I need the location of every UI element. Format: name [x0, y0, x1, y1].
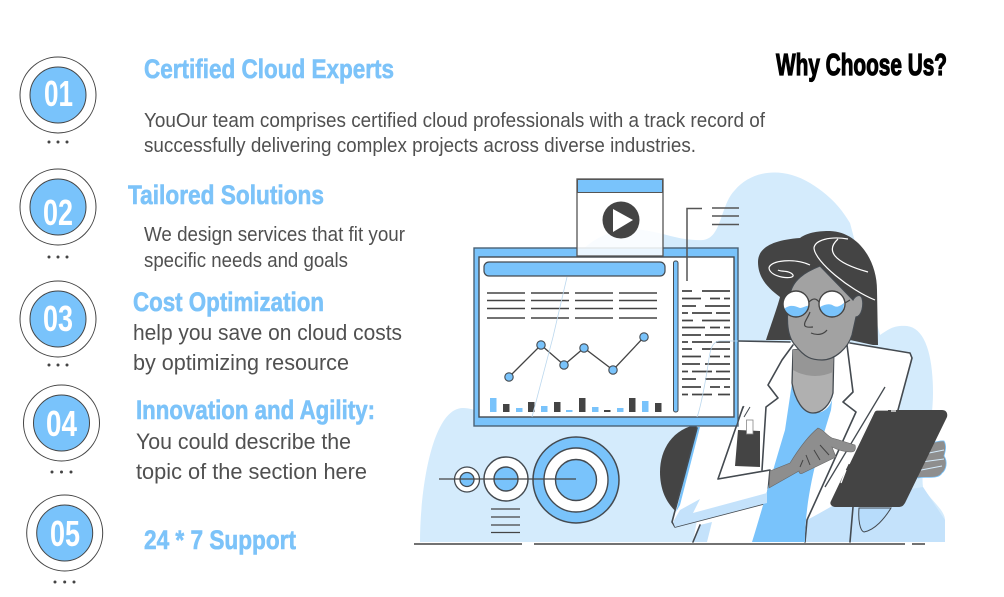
nose and smile	[805, 312, 827, 334]
video window	[577, 179, 663, 256]
coat outline	[672, 341, 912, 542]
number badge 04: 04	[46, 403, 77, 444]
neck shadow	[793, 345, 834, 376]
description 03: help you save on cloud costs	[133, 320, 402, 345]
lab coat	[672, 341, 945, 542]
item 05	[27, 495, 296, 584]
sleeve shade	[673, 493, 767, 527]
table lines	[487, 293, 657, 318]
heading: cost optimization: Cost Optimization	[133, 287, 324, 317]
coat hem shade	[693, 522, 712, 542]
coat pocket with badge	[718, 406, 770, 479]
background blob	[420, 173, 945, 542]
line chart	[505, 333, 648, 381]
illustration: doctor with dashboard	[414, 173, 947, 544]
search bar	[484, 262, 665, 276]
pointing hand	[769, 428, 855, 488]
description 01: YouOur team comprises certified cloud professionals with a track record of	[144, 110, 765, 132]
monitor	[474, 248, 738, 426]
tablet stand shade	[859, 508, 891, 532]
tablet	[830, 410, 947, 507]
article text lines	[682, 291, 730, 394]
number badge 05	[27, 495, 103, 584]
heading: certified cloud experts: Certified Cloud Experts	[144, 54, 394, 84]
item 03	[20, 281, 402, 375]
scroll bar	[674, 261, 678, 412]
callout bracket and lines	[687, 208, 739, 281]
heading: innovation and agility: Innovation and Agility:	[136, 395, 375, 425]
description 04: topic of the section here	[136, 459, 367, 484]
tablet hand fingers	[912, 441, 946, 478]
number badge 05: 05	[50, 513, 80, 554]
item 01	[20, 54, 765, 157]
faint blob outline on screen	[532, 277, 738, 417]
coat crease line	[825, 387, 885, 487]
glasses	[783, 291, 850, 317]
icon: play button	[602, 202, 640, 238]
description 03: by optimizing resource	[133, 350, 349, 375]
heading: tailored solutions: Tailored Solutions	[128, 180, 324, 210]
concentric circles	[439, 437, 619, 532]
bar chart	[490, 398, 662, 412]
description 02: We design services that fit your	[144, 224, 405, 246]
heading: 24*7 support: 24 * 7 Support	[144, 525, 296, 555]
hair	[758, 231, 878, 345]
number badge 03: 03	[43, 298, 73, 339]
baseline	[414, 543, 925, 545]
description 01: successfully delivering complex projects across diverse industries.	[144, 135, 696, 157]
hair lower back	[660, 424, 700, 515]
number badge 01: 01	[44, 73, 73, 114]
number badge 02: 02	[43, 192, 73, 233]
number badge 01	[20, 57, 96, 144]
coat lower shade	[805, 487, 945, 542]
item 04	[24, 385, 375, 484]
neck	[792, 345, 834, 413]
number badge 04	[24, 385, 100, 474]
blue shirt	[752, 383, 833, 542]
coat left edge shade	[676, 427, 700, 512]
hair strands	[769, 238, 875, 300]
face	[787, 266, 863, 360]
item 02	[20, 169, 405, 272]
description 02: specific needs and goals	[144, 250, 348, 272]
number badge 03	[20, 281, 96, 366]
description 04: You could describe the	[136, 429, 351, 454]
number badge 02	[20, 169, 96, 258]
